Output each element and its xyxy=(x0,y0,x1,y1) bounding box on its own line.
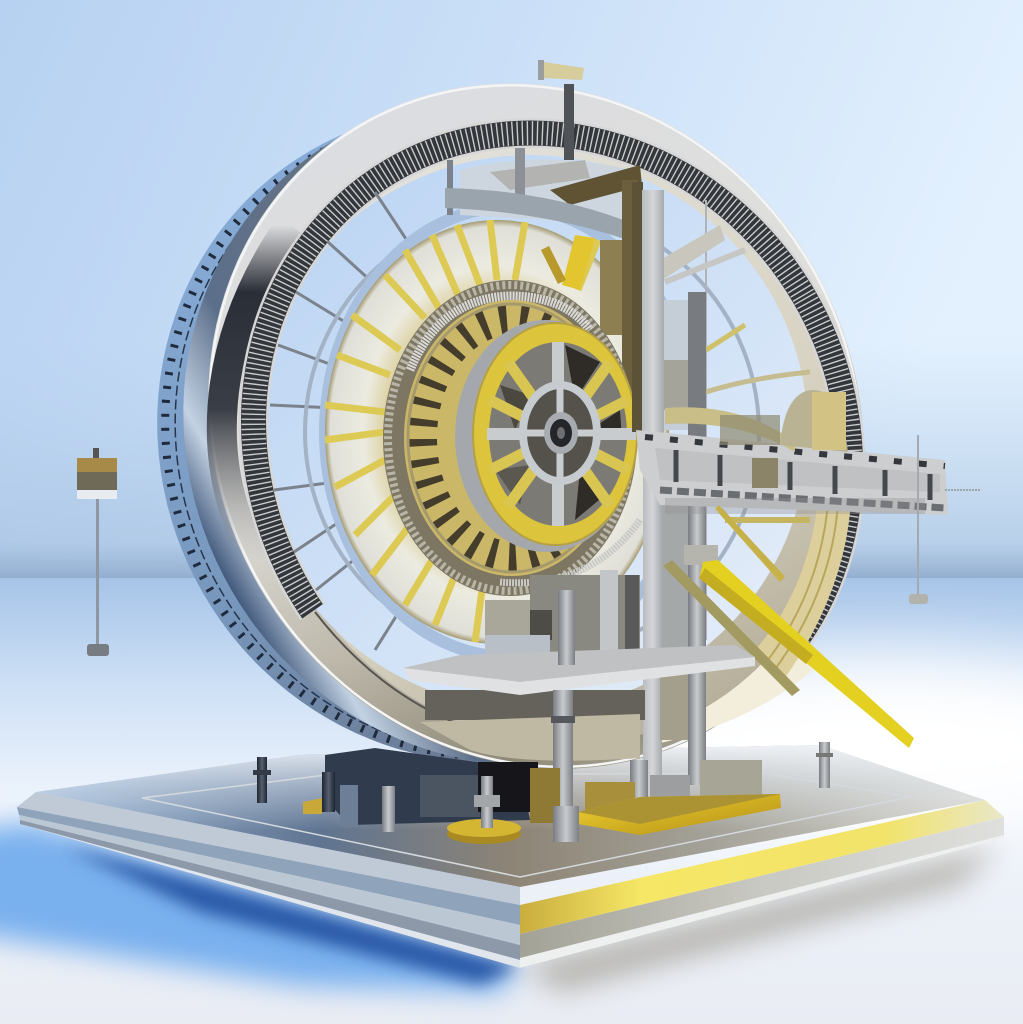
cream reflection lower right xyxy=(650,655,800,725)
gold slab xyxy=(578,794,781,835)
wheel front silver ring xyxy=(84,0,988,889)
wheel back rim xyxy=(38,0,948,883)
base plate xyxy=(17,745,1004,968)
central columns xyxy=(551,590,648,840)
lower inner band line xyxy=(315,612,560,748)
middle platform xyxy=(403,645,755,695)
right small post xyxy=(909,435,928,604)
lower machinery xyxy=(325,748,762,825)
central hub xyxy=(455,320,637,552)
window spokes xyxy=(270,160,810,657)
right side gold coil xyxy=(755,500,851,678)
yellow fins xyxy=(422,320,602,556)
machinery between the tower beams xyxy=(660,225,725,655)
gold disc with bolt xyxy=(447,776,521,844)
yellow turbine xyxy=(325,220,669,644)
floor with shadow xyxy=(0,578,1023,1024)
left small gauge on stem xyxy=(77,448,117,656)
grey gear ring xyxy=(383,280,640,596)
lower interior machinery xyxy=(485,570,640,655)
yellow diagonal bar xyxy=(663,507,914,748)
turbine blades xyxy=(325,220,598,642)
dark reflection on left band xyxy=(222,225,290,570)
upper machinery xyxy=(445,148,642,430)
bolts xyxy=(253,742,833,842)
background wall xyxy=(0,0,1023,578)
under-platform band xyxy=(420,670,688,761)
hub spokes xyxy=(487,342,636,526)
interior window xyxy=(238,118,866,735)
horizontal rail arm xyxy=(636,390,980,515)
hub dark wedges xyxy=(495,345,622,520)
hatched ring xyxy=(238,118,866,645)
top clamp xyxy=(538,60,584,160)
main vertical tower xyxy=(632,182,718,815)
